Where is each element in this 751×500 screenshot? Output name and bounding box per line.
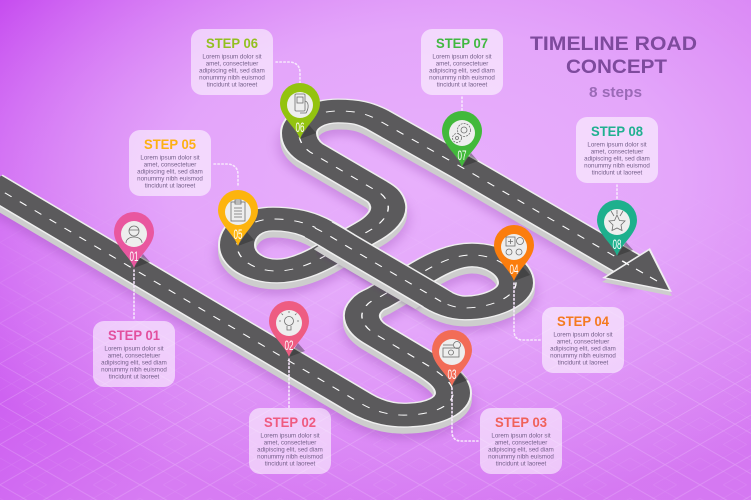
card: step 05: amet, consectetuer [144, 161, 196, 168]
title [530, 33, 697, 101]
title: CONCEPT [566, 56, 667, 78]
card: step 03 [480, 408, 562, 474]
title: 8 steps [589, 84, 642, 101]
pin 02 [269, 301, 309, 357]
pin 06 [280, 83, 320, 139]
background grid [0, 254, 751, 500]
card: step 02: tincidunt ut laoreet [265, 460, 316, 467]
icon: clipboard [231, 200, 245, 221]
icon: gears [452, 124, 470, 142]
pin 03: 03 [448, 367, 456, 382]
card: step 02: STEP 02 [264, 414, 316, 430]
card: step 01: nonummy nibh euismod [101, 366, 167, 373]
card: step 06: adipiscing elit, sed diam [199, 67, 265, 74]
pin 07: 07 [458, 148, 466, 163]
card: step 01: adipiscing elit, sed diam [101, 359, 167, 366]
card: step 03: STEP 03 [495, 414, 547, 430]
icon: light bulb [279, 311, 299, 330]
pin 01 [114, 212, 154, 268]
pin 03 [432, 330, 472, 386]
card: step 02 [249, 408, 331, 474]
card: step 05: Lorem ipsum dolor sit [140, 154, 200, 161]
card: step 05: nonummy nibh euismod [137, 175, 203, 182]
card: step 08: STEP 08 [591, 123, 643, 139]
card: step 01: tincidunt ut laoreet [109, 373, 160, 380]
road overpass [315, 228, 441, 301]
card: step 04: tincidunt ut laoreet [558, 359, 609, 366]
pin 04: 04 [510, 262, 519, 277]
card: step 02: Lorem ipsum dolor sit [260, 432, 320, 439]
card: step 02: adipiscing elit, sed diam [257, 446, 323, 453]
card: step 08: tincidunt ut laoreet [592, 169, 643, 176]
pin 04 [494, 225, 534, 281]
pin 08: 08 [612, 237, 622, 252]
pin 02: 02 [284, 338, 294, 353]
card: step 05 [129, 130, 211, 196]
card: step 07: STEP 07 [436, 35, 488, 51]
icon: star [609, 210, 625, 230]
pin 05 [218, 190, 258, 246]
road [0, 111, 672, 426]
card: step 01 [93, 321, 175, 387]
icon: phone in hand [295, 94, 308, 113]
card: step 02: amet, consectetuer [264, 439, 316, 446]
title: TIMELINE ROAD [530, 33, 697, 55]
card: step 04: nonummy nibh euismod [550, 352, 616, 359]
card: step 01: STEP 01 [108, 327, 160, 343]
card: step 05: STEP 05 [144, 136, 196, 152]
card: step 04: Lorem ipsum dolor sit [553, 331, 613, 338]
card: step 01: amet, consectetuer [108, 352, 160, 359]
card: step 08 [576, 117, 658, 183]
card: step 05: tincidunt ut laoreet [145, 182, 196, 189]
card: step 06: STEP 06 [206, 35, 258, 51]
card: step 07: adipiscing elit, sed diam [429, 67, 495, 74]
icon: money [443, 342, 460, 357]
card: step 03: amet, consectetuer [495, 439, 547, 446]
card: step 07: amet, consectetuer [436, 60, 488, 67]
card: step 08: amet, consectetuer [591, 148, 643, 155]
pin 07 [442, 111, 482, 167]
pin 05: 05 [234, 227, 242, 242]
card: step 05: adipiscing elit, sed diam [137, 168, 203, 175]
card: step 03: nonummy nibh euismod [488, 453, 554, 460]
card: step 07: tincidunt ut laoreet [437, 81, 488, 88]
card: step 07: nonummy nibh euismod [429, 74, 495, 81]
card: step 04 [542, 307, 624, 373]
icon: person [126, 226, 142, 243]
card: step 01: Lorem ipsum dolor sit [104, 345, 164, 352]
card: step 06: nonummy nibh euismod [199, 74, 265, 81]
card: step 08: Lorem ipsum dolor sit [587, 141, 647, 148]
card: step 03: adipiscing elit, sed diam [488, 446, 554, 453]
card: step 07: Lorem ipsum dolor sit [432, 53, 492, 60]
card: step 03: Lorem ipsum dolor sit [491, 432, 551, 439]
card: step 06: tincidunt ut laoreet [207, 81, 258, 88]
card: step 06: amet, consectetuer [206, 60, 258, 67]
card: step 07 [421, 29, 503, 95]
card: step 08: adipiscing elit, sed diam [584, 155, 650, 162]
pin 08 [597, 200, 637, 256]
card: step 02: nonummy nibh euismod [257, 453, 323, 460]
connector dots [134, 62, 617, 441]
icon: medical and cycle [506, 237, 524, 255]
card: step 04: amet, consectetuer [557, 338, 609, 345]
card: step 06 [191, 29, 273, 95]
pin 06: 06 [296, 120, 304, 135]
pin 01: 01 [130, 249, 138, 264]
card: step 03: tincidunt ut laoreet [496, 460, 547, 467]
arrow head [602, 248, 672, 296]
card: step 04: STEP 04 [557, 313, 609, 329]
card: step 08: nonummy nibh euismod [584, 162, 650, 169]
card: step 04: adipiscing elit, sed diam [550, 345, 616, 352]
card: step 06: Lorem ipsum dolor sit [202, 53, 262, 60]
